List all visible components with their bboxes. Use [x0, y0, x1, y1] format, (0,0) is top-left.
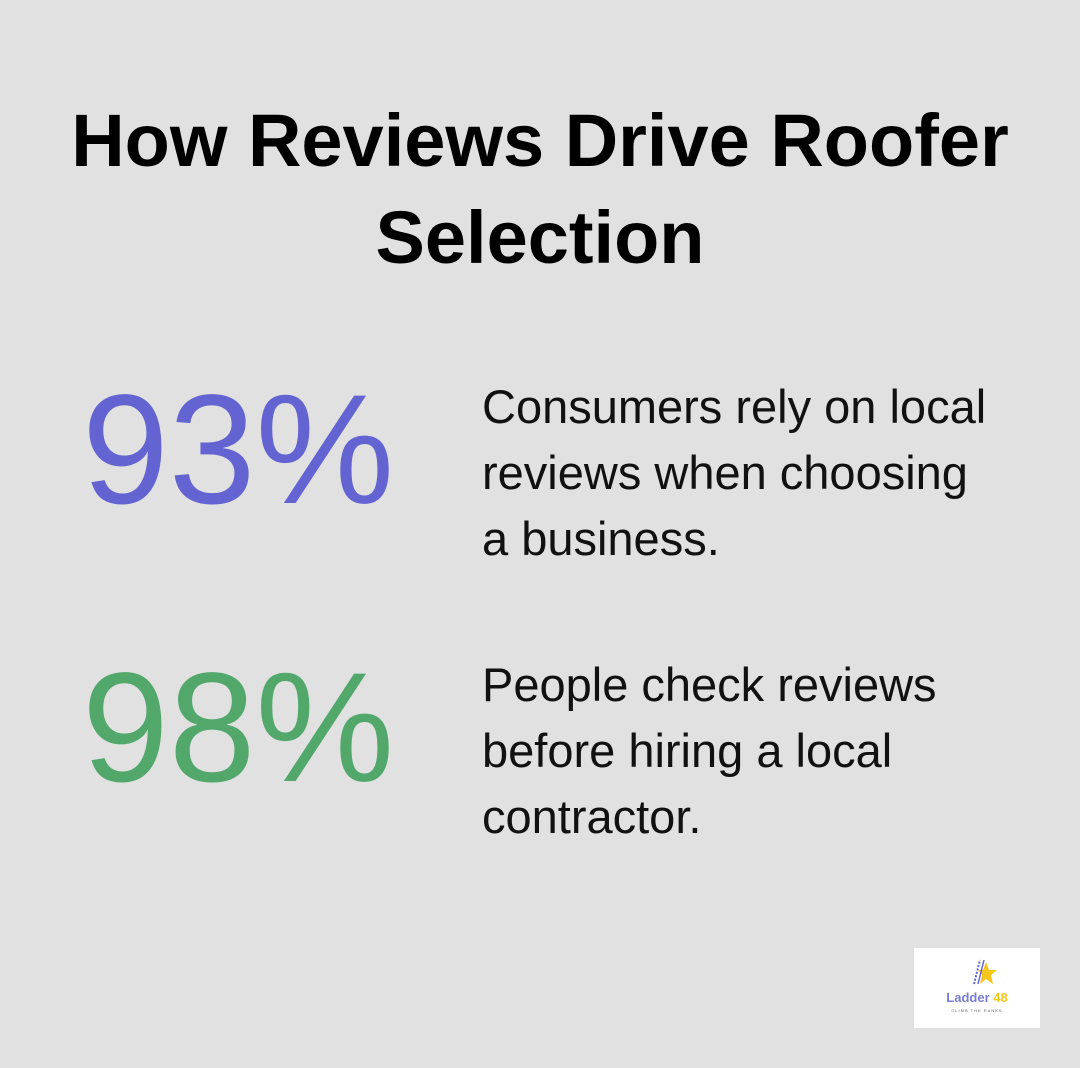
text: 93% description: reviews when choosing — [482, 446, 968, 499]
logo text: Ladder 48 — [946, 990, 1008, 1005]
text: 98% description: before hiring a local — [482, 724, 892, 777]
text: 93% description: a business. — [482, 512, 720, 565]
stat: 93%: 93% — [82, 363, 394, 537]
title — [71, 99, 1009, 279]
text: 98% description: People check reviews — [482, 658, 937, 711]
title: How Reviews Drive Roofer — [71, 99, 1009, 182]
icon: ladder star — [973, 960, 997, 984]
title: Selection — [376, 196, 704, 279]
text: 93% description — [482, 380, 986, 565]
stat: 98%: 98% — [82, 641, 394, 815]
logo: Ladder 48 — [914, 948, 1040, 1028]
text: 98% description — [482, 658, 937, 843]
text: 93% description: Consumers rely on local — [482, 380, 986, 433]
logo: Ladder 48: CLIMB THE RANKS — [951, 1008, 1003, 1013]
text: 98% description: contractor. — [482, 790, 701, 843]
